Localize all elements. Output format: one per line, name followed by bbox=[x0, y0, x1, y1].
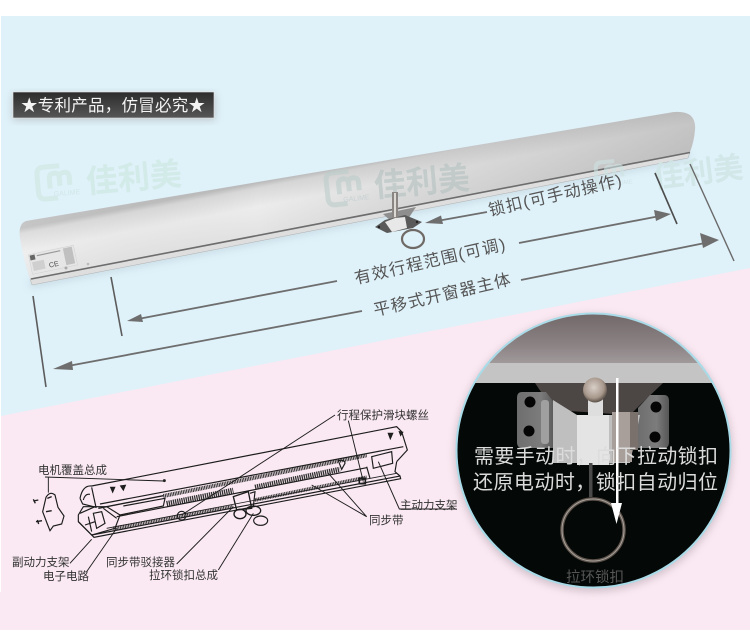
hatched screw bbox=[167, 491, 233, 504]
tick: body left end bbox=[33, 296, 46, 387]
leader: belt connector bbox=[177, 507, 233, 564]
circle shadow bbox=[454, 314, 732, 592]
text: pull ring lock: 拉环锁扣 bbox=[566, 569, 624, 586]
leader: belt bbox=[312, 473, 367, 517]
leader: main bracket bbox=[378, 462, 457, 509]
right bracket bbox=[372, 452, 393, 468]
bar soft shadow bbox=[30, 152, 690, 288]
pin stem bbox=[588, 399, 603, 415]
left motor bracket bbox=[78, 507, 120, 535]
upper grey band bbox=[490, 314, 698, 363]
badge: patent notice bbox=[13, 92, 215, 120]
arrow: body right bbox=[521, 233, 719, 280]
label: aux bracket: 副动力支架 bbox=[12, 556, 70, 569]
lock base plate bbox=[375, 215, 422, 233]
watermark: left logo: GALIME bbox=[53, 189, 81, 198]
lock rod bbox=[392, 192, 398, 218]
badge: patent notice: ★专利产品，仿冒必究★ bbox=[21, 96, 205, 115]
bar lower rail bbox=[30, 152, 690, 285]
dimension: effective travel range bbox=[111, 173, 677, 336]
arrow: travel left bbox=[127, 281, 337, 322]
pull-ring lock on bar bbox=[375, 192, 424, 248]
arrow: travel right bbox=[519, 210, 671, 243]
watermark: right brand name: 佳利美 bbox=[652, 151, 745, 195]
detached end cap bbox=[43, 493, 64, 531]
callout: lock detail circle bbox=[450, 310, 740, 592]
circle background bbox=[456, 313, 731, 588]
watermark: centre logo on bar: GALIME bbox=[343, 194, 370, 204]
background: pink lower zone bbox=[0, 268, 750, 630]
watermark: right logo bbox=[595, 160, 633, 189]
arrow: pull down bbox=[611, 378, 622, 524]
watermark: right logo: GALIME bbox=[610, 180, 633, 187]
base rails bbox=[92, 476, 401, 537]
watermark: left logo bbox=[36, 164, 81, 200]
product: window opener body bbox=[20, 112, 695, 288]
arrow: body left bbox=[53, 311, 362, 370]
label: main body: 平移式开窗器主体 bbox=[372, 270, 513, 320]
light bar underside bbox=[476, 363, 712, 383]
label: circuit: 电子电路 bbox=[43, 569, 89, 583]
leader: slider screw bbox=[182, 415, 335, 515]
bar screws bbox=[64, 266, 68, 270]
upper hatched belt bbox=[163, 455, 367, 496]
tick: travel left end bbox=[111, 277, 122, 336]
cover screws bbox=[111, 487, 115, 492]
tick: travel right end bbox=[655, 173, 677, 224]
right plate bbox=[638, 395, 669, 448]
dimension: opener main body bbox=[33, 164, 734, 387]
arrow: lock left bbox=[425, 212, 487, 224]
tick: body right end bbox=[690, 164, 734, 261]
carriage bbox=[233, 492, 252, 510]
leader: circuit bbox=[87, 528, 117, 572]
product spec label: CE bbox=[49, 261, 60, 270]
pull rod bbox=[589, 463, 592, 497]
label: main bracket: 主动力支架 bbox=[400, 499, 458, 512]
lock ring bbox=[402, 230, 424, 248]
lock white slider bbox=[385, 217, 407, 232]
background: blue upper zone bbox=[1, 16, 750, 426]
product spec label bbox=[28, 245, 78, 274]
label: lock manual: 锁扣(可手动操作) bbox=[487, 171, 623, 220]
left plate bbox=[517, 392, 556, 448]
circle border bbox=[456, 314, 730, 588]
cover outline bbox=[80, 427, 407, 498]
circle photo content bbox=[476, 314, 712, 563]
carriage rails bbox=[117, 468, 367, 517]
label: motor cover: 电机覆盖总成 bbox=[38, 463, 107, 477]
leader: ring lock bbox=[218, 513, 253, 570]
label: ring lock assembly: 拉环锁扣总成 bbox=[149, 568, 218, 582]
watermark: centre logo on bar bbox=[325, 169, 370, 205]
label: belt connector: 同步带驳接器 bbox=[106, 556, 175, 569]
pull ring bbox=[562, 499, 624, 561]
wedge bracket bbox=[535, 383, 663, 415]
lock bracket shadow wedge bbox=[383, 207, 416, 222]
label: travel range: 有效行程范围(可调) bbox=[353, 235, 507, 288]
leader: aux bracket bbox=[70, 539, 92, 563]
leader: motor cover bbox=[45, 477, 163, 493]
pin head bbox=[583, 378, 607, 402]
exploded line diagram bbox=[12, 408, 458, 583]
bar groove line bbox=[31, 152, 690, 279]
label: timing belt: 同步带 bbox=[369, 514, 404, 527]
label: slider screw: 行程保护滑块螺丝 bbox=[337, 408, 429, 422]
bar main shell bbox=[20, 112, 695, 279]
diagram drawing bbox=[33, 415, 457, 572]
bar shading bbox=[20, 112, 695, 279]
dimension: lock manual travel bbox=[425, 171, 623, 224]
white slider bbox=[553, 400, 640, 463]
text: manual instruction: 需要手动时，向下拉动锁扣 bbox=[474, 445, 718, 468]
watermark: centre brand name: 佳利美 bbox=[372, 160, 471, 204]
watermark: left brand name: 佳利美 bbox=[84, 156, 183, 200]
text: restore instruction: 还原电动时，锁扣自动归位 bbox=[473, 471, 718, 494]
